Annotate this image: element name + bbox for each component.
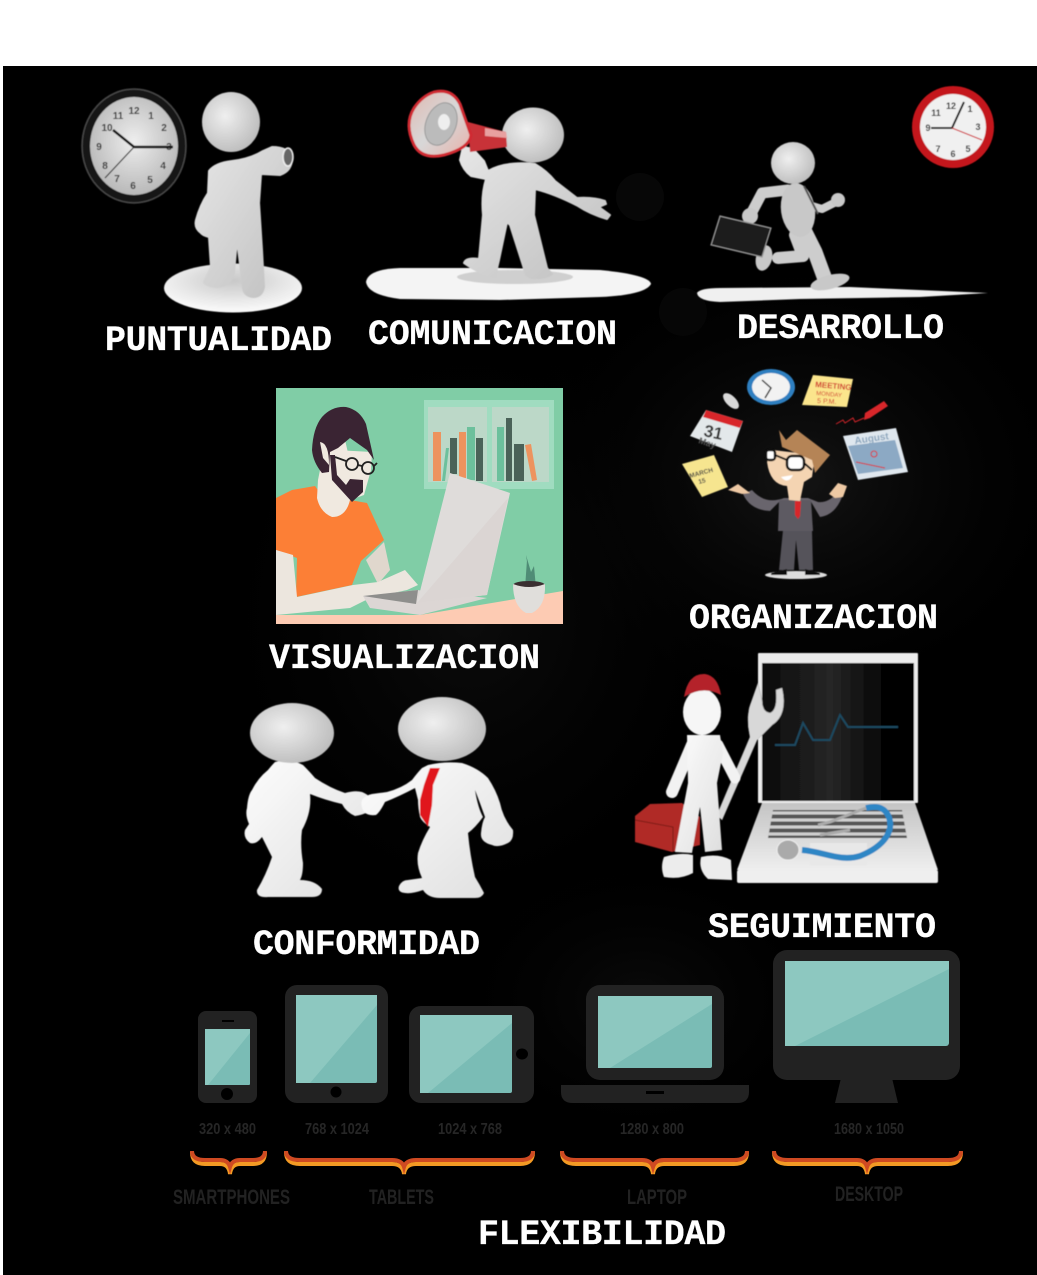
category labels: DESKTOP bbox=[835, 1183, 903, 1206]
icon: paper clip bbox=[720, 390, 742, 412]
icon: calendar 31 May: May bbox=[697, 435, 717, 450]
icon: meeting sticky note bbox=[802, 375, 853, 407]
category labels: SMARTPHONES bbox=[173, 1186, 290, 1209]
icon: yellow note: MARCH bbox=[689, 467, 714, 480]
icon: wall clock: 4 bbox=[160, 161, 166, 172]
figure: left person bbox=[245, 703, 374, 897]
icon: red clock: 9 bbox=[925, 123, 931, 133]
panel: conformidad handshake bbox=[245, 697, 513, 898]
icon: wall clock: 1 bbox=[148, 111, 154, 122]
heading: flexibilidad: FLEXIBILIDAD bbox=[478, 1215, 726, 1255]
icon: megaphone bbox=[409, 91, 507, 156]
panel: organizacion bbox=[682, 369, 908, 579]
category labels bbox=[173, 1183, 903, 1209]
resolution labels bbox=[199, 1121, 904, 1138]
icon: red clock: 1 bbox=[967, 104, 973, 114]
device: smartphone bbox=[198, 1011, 257, 1103]
icon: yellow note: 15 bbox=[698, 477, 707, 486]
figure: right person with red tie bbox=[361, 697, 513, 898]
category labels: LAPTOP bbox=[627, 1186, 687, 1209]
heading: seguimiento: SEGUIMIENTO bbox=[708, 908, 936, 948]
panel: flexibilidad devices bbox=[173, 950, 961, 1209]
icon: blue clock bbox=[747, 369, 795, 405]
icon: wall clock: 11 bbox=[113, 111, 124, 122]
figure: running person with briefcase bbox=[697, 142, 988, 302]
icon: wall clock: 9 bbox=[96, 142, 102, 153]
resolution labels: 1024 x 768 bbox=[438, 1121, 502, 1138]
resolution labels: 1280 x 800 bbox=[620, 1121, 684, 1138]
figure: businessman bbox=[728, 430, 847, 579]
heading: visualizacion: VISUALIZACION bbox=[269, 639, 540, 679]
icon: meeting sticky note: MONDAY bbox=[816, 391, 842, 399]
device: portrait tablet bbox=[285, 985, 388, 1103]
icon: calendar 31 May: 31 bbox=[702, 421, 725, 444]
panel: seguimiento bbox=[635, 653, 938, 883]
icon: meeting sticky note: MEETING bbox=[815, 380, 852, 392]
icon: red clock: 3 bbox=[975, 122, 981, 132]
resolution labels: 768 x 1024 bbox=[305, 1121, 369, 1138]
icon: red clock: 12 bbox=[946, 101, 956, 111]
icon: red clock: 6 bbox=[950, 149, 956, 159]
category labels: TABLETS bbox=[369, 1186, 434, 1209]
panel: desarrollo bbox=[697, 86, 994, 302]
icon: wall clock bbox=[82, 89, 186, 203]
icon: meeting sticky note: 5 P.M. bbox=[817, 398, 837, 406]
device: desktop monitor bbox=[773, 950, 960, 1103]
orange braces bbox=[192, 1151, 961, 1174]
person at laptop bbox=[276, 407, 418, 615]
bookshelf bbox=[424, 400, 554, 489]
icon: wall clock: 10 bbox=[101, 123, 113, 134]
icon: yellow note bbox=[682, 455, 728, 497]
heading: puntualidad: PUNTUALIDAD bbox=[105, 321, 332, 361]
figure: repair worker with wrench and toolbox bbox=[635, 674, 784, 880]
heading: desarrollo: DESARROLLO bbox=[737, 309, 944, 349]
desk bbox=[276, 591, 563, 624]
panel: puntualidad bbox=[82, 89, 302, 312]
icon: august calendar bbox=[843, 428, 908, 480]
icon: wall clock: 2 bbox=[161, 123, 167, 134]
figure: person with megaphone bbox=[366, 108, 651, 300]
heading: comunicacion: COMUNICACION bbox=[368, 315, 617, 355]
device: laptop bbox=[561, 985, 749, 1103]
icon: wall clock: 5 bbox=[147, 175, 153, 186]
device: landscape tablet bbox=[409, 1006, 534, 1103]
icon: red marker bbox=[836, 401, 888, 424]
icon: wall clock: 8 bbox=[102, 161, 108, 172]
icon: calendar 31 May bbox=[690, 410, 743, 452]
resolution labels: 1680 x 1050 bbox=[834, 1121, 904, 1138]
icon: red clock: 5 bbox=[965, 144, 971, 154]
icon: wall clock: 12 bbox=[128, 106, 140, 117]
icon: red clock bbox=[912, 86, 994, 168]
icon: wall clock: 3 bbox=[166, 142, 172, 153]
icon: wall clock: 6 bbox=[130, 181, 136, 192]
panel: comunicacion bbox=[366, 91, 651, 300]
icon: august calendar: August bbox=[854, 431, 890, 447]
figure: person checking watch bbox=[164, 92, 302, 312]
panel: visualizacion illustration bbox=[276, 388, 563, 624]
potted plant bbox=[513, 555, 545, 613]
heading: conformidad: CONFORMIDAD bbox=[253, 925, 480, 965]
icon: wall clock: 7 bbox=[114, 174, 120, 185]
laptop bbox=[363, 473, 510, 615]
icon: red clock: 7 bbox=[935, 144, 941, 154]
resolution labels: 320 x 480 bbox=[199, 1121, 256, 1138]
laptop with stethoscope bbox=[737, 653, 938, 883]
icon: red clock: 11 bbox=[931, 108, 941, 118]
heading: organizacion: ORGANIZACION bbox=[689, 599, 938, 639]
